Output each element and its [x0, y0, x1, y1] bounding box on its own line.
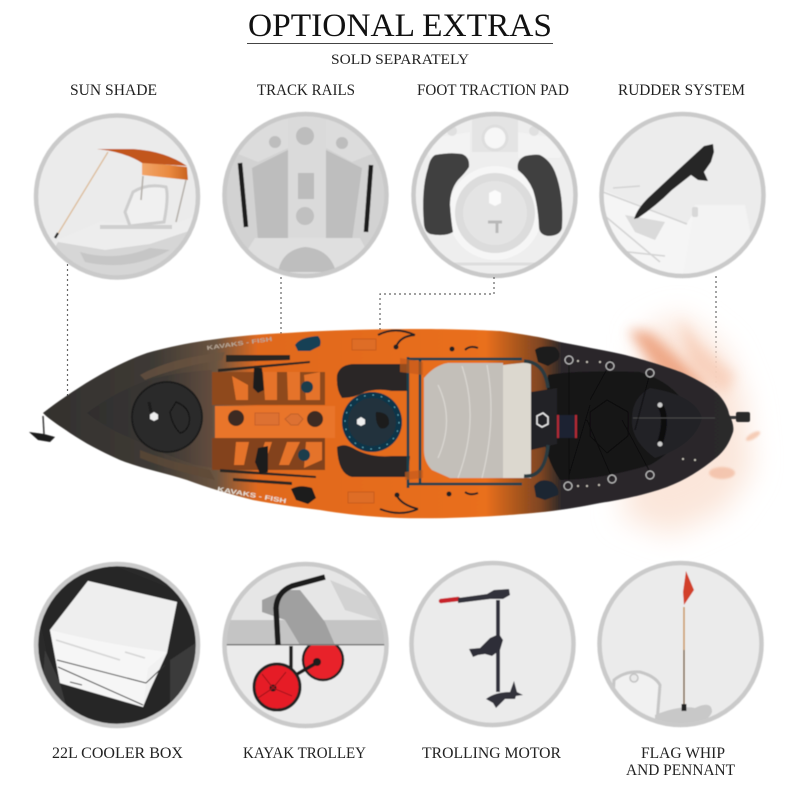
upper foot pad: [337, 364, 408, 398]
stern black well: [544, 371, 690, 480]
kayak: [29, 329, 750, 518]
box silhouette: [50, 581, 177, 707]
orange powder splash: [620, 315, 761, 535]
stern side plates: [535, 346, 559, 366]
strap: [276, 577, 325, 645]
title underline: [247, 42, 553, 44]
panel: cooler box: [36, 560, 205, 726]
eyelets: [564, 356, 654, 490]
center hatch: [342, 392, 402, 452]
pennant: [683, 571, 694, 605]
label: rudder system: RUDDER SYSTEM: [618, 82, 745, 99]
seat frame: [408, 357, 522, 488]
motor propeller: [486, 681, 523, 708]
brand text lower: KAVAKS - FISH: [217, 486, 287, 505]
bow handle: [29, 416, 55, 442]
motor body: [458, 589, 510, 603]
panel: foot traction pad: [414, 112, 576, 276]
top rails: [218, 355, 310, 372]
panel: kayak trolley: [220, 560, 392, 726]
seat back: [531, 388, 557, 450]
brand text upper: KAVAKS - FISH: [206, 337, 273, 352]
connector: rudder system: [715, 276, 717, 412]
bungee cords: [569, 360, 650, 480]
hexagon logo: [590, 400, 628, 453]
box top face shade: [50, 580, 178, 630]
box front face: [49, 630, 144, 708]
bow recess: [88, 372, 200, 464]
subtitle: SOLD SEPARATELY: [331, 52, 470, 68]
motor clamp: [469, 634, 503, 657]
label: flag whip and pennant: FLAG WHIP: [641, 745, 725, 762]
label: flag whip and pennant: [626, 745, 736, 779]
side plates center: [465, 347, 478, 494]
bottom rails: [220, 469, 316, 485]
tiller handle: [441, 599, 458, 601]
lower foot pad: [337, 445, 410, 477]
ghost seat: [612, 672, 660, 722]
center line: [633, 417, 715, 419]
stern rudder mount: [713, 412, 750, 422]
label: foot traction pad: FOOT TRACTION PAD: [417, 82, 569, 99]
rudder blade: [634, 144, 714, 219]
connector: foot traction pad: [380, 277, 494, 378]
panel: sun shade: [30, 116, 205, 290]
left pad: [423, 153, 469, 235]
far wheel: [303, 640, 343, 680]
kayak hull band: [220, 560, 392, 645]
upper deck plates: [295, 336, 321, 351]
seat mesh: [424, 363, 503, 478]
rod holders: [253, 368, 264, 393]
pole: [683, 607, 685, 708]
panel: trolling motor: [412, 563, 574, 725]
motor shaft: [496, 600, 500, 692]
right rail: [366, 165, 371, 232]
bow hull highlight: [140, 352, 225, 380]
label: track rails: TRACK RAILS: [257, 82, 355, 99]
stern rear handle: [660, 405, 664, 443]
label: kayak trolley: KAYAK TROLLEY: [243, 745, 366, 762]
hull: [43, 329, 733, 518]
label: flag whip and pennant: AND PENNANT: [626, 762, 736, 779]
seat cushion: [503, 362, 531, 478]
label: cooler box: 22L COOLER BOX: [52, 745, 183, 762]
label: trolling motor: TROLLING MOTOR: [422, 745, 562, 762]
panel: track rails: [224, 110, 386, 285]
upper foot well: [212, 372, 325, 405]
pole base: [682, 704, 686, 711]
bow hatch: [131, 381, 203, 453]
title: OPTIONAL EXTRAS: [248, 8, 552, 44]
seat pocket: [558, 415, 576, 438]
label: sun shade: SUN SHADE: [70, 82, 157, 99]
near wheel: [254, 664, 300, 710]
panel: flag whip: [600, 563, 762, 727]
right pad: [518, 155, 562, 236]
connector: track rails: [280, 277, 282, 340]
central deck: [215, 406, 335, 438]
connector: sun shade: [66, 264, 68, 398]
panel: rudder system: [602, 114, 764, 280]
axle: [280, 646, 318, 684]
left rail: [240, 163, 246, 227]
lower foot well: [212, 438, 325, 470]
front cords: [378, 330, 418, 513]
